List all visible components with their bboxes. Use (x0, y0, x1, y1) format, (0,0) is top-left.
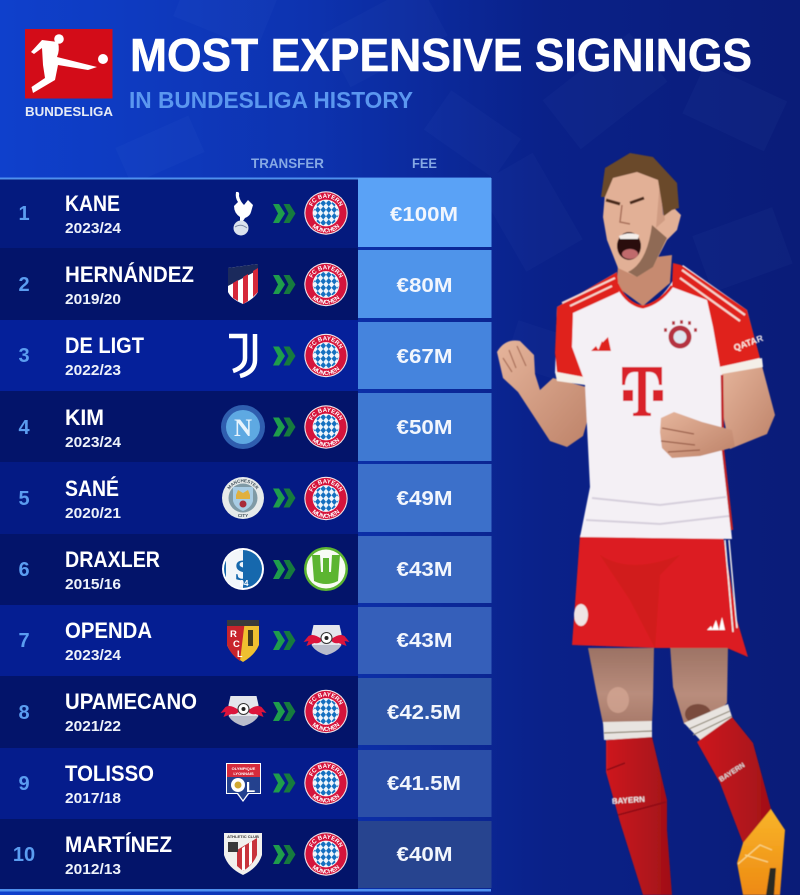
crest: Atletico (228, 264, 258, 304)
row 6: Draxler: DRAXLER (65, 547, 160, 572)
logo: Bundesliga: BUNDESLIGA (25, 105, 113, 119)
fee box (358, 464, 492, 532)
row 1: Kane: 1 (18, 203, 30, 225)
crest: Bayern: FC BAYERN (308, 336, 344, 349)
row 7: Openda: OPENDA (65, 618, 152, 643)
hair (601, 153, 679, 216)
crest: Bayern: FC BAYERN (308, 194, 344, 206)
row 2: Hernandez: HERNÁNDEZ (65, 262, 194, 287)
row 6: Draxler: 2015/16 (65, 576, 121, 593)
fee: €49M (396, 488, 452, 510)
sponsor logo (622, 367, 663, 416)
column heading: fee: FEE (412, 155, 437, 171)
fee box (358, 322, 492, 389)
crest: RB Leipzig (304, 625, 350, 655)
row 9: Tolisso: 2017/18 (65, 790, 121, 807)
fee box (358, 678, 492, 745)
shorts (572, 535, 748, 657)
crest: Bayern: FC BAYERN (308, 265, 344, 278)
row 3: De Ligt: DE LIGT (65, 333, 145, 358)
row 3: De Ligt: 3 (18, 345, 30, 367)
neck (617, 255, 672, 306)
arrow (273, 702, 296, 721)
row 7: Openda (0, 605, 492, 676)
crest: Bayern: MÜNCHEN (312, 438, 340, 446)
left leg: BAYERN (612, 795, 645, 806)
crest: RB Leipzig (220, 696, 266, 726)
club crest on shirt (664, 322, 697, 348)
row 2: Hernandez: 2 (18, 274, 30, 296)
boot (737, 809, 785, 895)
row 2: Hernandez: 2019/20 (65, 291, 121, 308)
fee box (358, 536, 492, 603)
left leg (588, 648, 672, 895)
crest: Lens: R (230, 629, 237, 640)
row 3: De Ligt: 2022/23 (65, 362, 121, 379)
crest: Juventus (229, 334, 255, 376)
crest: Lyon: L (246, 779, 255, 796)
crest: Manchester City (222, 477, 264, 519)
left arm (497, 340, 590, 447)
fee box (358, 821, 492, 888)
right sleeve (672, 263, 760, 367)
crest: Napoli: N (234, 415, 252, 442)
crest: Wolfsburg (304, 547, 348, 591)
arrow (273, 631, 296, 650)
title: MOST EXPENSIVE SIGNINGS (130, 29, 752, 81)
crest: Lyon: OLYMPIQUE (232, 766, 256, 771)
row 4: Kim: 2023/24 (65, 434, 122, 451)
shaded cheek and stubble (628, 225, 667, 277)
crest: Lens (227, 620, 259, 662)
fee: €80M (396, 275, 452, 297)
fee: €43M (396, 630, 452, 652)
arrow (273, 774, 296, 792)
nose (620, 205, 630, 224)
row 1: Kane: 2023/24 (65, 220, 122, 237)
sleeve sponsor: QATAR (732, 333, 765, 353)
crest: Bayern: MÜNCHEN (312, 722, 340, 731)
cuffs (555, 358, 763, 385)
crest: Lens: L (237, 649, 243, 659)
crest: Lyon (226, 763, 261, 802)
collar (617, 284, 672, 307)
crest: Bayern (304, 191, 348, 235)
fee: €41.5M (387, 773, 461, 795)
arrow (273, 346, 296, 366)
crest: Lens: C (233, 639, 240, 650)
column heading: transfer: TRANSFER (251, 155, 324, 171)
fee box (358, 393, 492, 461)
row 8: Upamecano (18, 678, 492, 745)
fee box (358, 750, 492, 817)
crest: Bayern: FC BAYERN (308, 834, 344, 848)
arrow (273, 204, 296, 223)
logo: Bundesliga (25, 29, 113, 119)
crest: Bayern (304, 832, 348, 876)
crest: Bayern (304, 405, 348, 449)
arrow (273, 418, 296, 436)
right leg (670, 645, 774, 843)
row 5: Sane: 2020/21 (65, 505, 121, 522)
shoulder stripes (562, 270, 745, 321)
player: Harry Kane (497, 153, 785, 895)
row 9: Tolisso: 9 (18, 773, 30, 795)
crest: Schalke (222, 548, 264, 590)
crest: Bayern (304, 690, 348, 734)
row 4: Kim: KIM (65, 405, 104, 430)
arrow (273, 275, 296, 294)
crest: Bayern: FC BAYERN (308, 408, 344, 420)
eyes and brows (606, 198, 644, 204)
row 7: Openda: 7 (18, 630, 30, 652)
crest: Tottenham (234, 192, 253, 236)
crest: Bayern: FC BAYERN (308, 692, 344, 705)
row 8: Upamecano: UPAMECANO (65, 689, 197, 714)
crest: Athletic Club: ATHLETIC CLUB (227, 834, 259, 839)
row 5: Sane (0, 462, 492, 534)
left sleeve (555, 272, 619, 377)
crest: Bayern: MÜNCHEN (312, 224, 340, 232)
crest: Manchester City: MANCHESTER (227, 479, 258, 490)
right arm (720, 366, 775, 449)
row 1: Kane: KANE (65, 191, 120, 216)
fee: €42.5M (387, 702, 461, 724)
row 2: Hernandez (18, 250, 492, 318)
crest: Bayern: FC BAYERN (308, 764, 344, 776)
adidas logo on shirt (591, 337, 611, 351)
fee: €43M (396, 559, 452, 581)
crest: Bayern: MÜNCHEN (312, 864, 340, 874)
icon: player silhouette and ball (31, 34, 108, 93)
row 6: Draxler (0, 534, 492, 605)
subtitle: IN BUNDESLIGA HISTORY (129, 87, 413, 113)
row 9: Tolisso: TOLISSO (65, 761, 154, 786)
crest: Schalke: 04 (240, 579, 249, 588)
crest: Bayern: MÜNCHEN (312, 509, 340, 518)
crest: Bayern: MÜNCHEN (312, 295, 340, 304)
crest: Bayern: MÜNCHEN (312, 794, 340, 802)
arrow (273, 845, 296, 864)
row 10: Martinez: 10 (13, 844, 35, 866)
arrow (273, 488, 296, 508)
row 4: Kim (18, 393, 492, 461)
crest on shorts (574, 604, 588, 626)
crest: Bayern (304, 334, 348, 378)
right leg: BAYERN (718, 762, 746, 784)
mouth (617, 232, 641, 260)
crest: Bayern (304, 476, 348, 520)
crest: Bayern (304, 262, 348, 306)
hand (660, 412, 735, 458)
fee box (358, 250, 492, 318)
arrow (273, 560, 296, 579)
row 8: Upamecano: 8 (18, 702, 30, 724)
row 7: Openda: 2023/24 (65, 647, 122, 664)
table: ranking (0, 178, 492, 892)
crest: Bayern: MÜNCHEN (312, 366, 340, 375)
fee box (358, 178, 492, 247)
crest: Lyon: LYONNAIS (233, 771, 254, 776)
row 9: Tolisso (0, 748, 492, 819)
crest: Bayern (304, 761, 348, 805)
fee: €67M (396, 346, 452, 368)
shirt (555, 265, 762, 539)
head (601, 153, 681, 277)
row 10: Martinez (13, 821, 492, 888)
row 1: Kane (0, 178, 492, 248)
row 3: De Ligt (0, 320, 492, 391)
crest: Napoli (221, 405, 265, 449)
crest: Bayern: FC BAYERN (308, 479, 344, 492)
row 10: Martinez: MARTÍNEZ (65, 832, 172, 857)
row 10: Martinez: 2012/13 (65, 861, 121, 878)
crest: Schalke: S (235, 554, 251, 587)
crest: Athletic Club (224, 833, 262, 875)
fee box (358, 607, 492, 674)
row 4: Kim: 4 (18, 417, 30, 439)
crest: Manchester City: CITY (238, 513, 248, 518)
fee: €100M (390, 204, 458, 226)
logo on shorts (707, 617, 725, 630)
row 6: Draxler: 6 (18, 559, 30, 581)
row 5: Sane: SANÉ (65, 476, 119, 501)
fee: €40M (396, 844, 452, 866)
fee: €50M (396, 417, 452, 439)
row 8: Upamecano: 2021/22 (65, 718, 121, 735)
row 5: Sane: 5 (18, 488, 30, 510)
